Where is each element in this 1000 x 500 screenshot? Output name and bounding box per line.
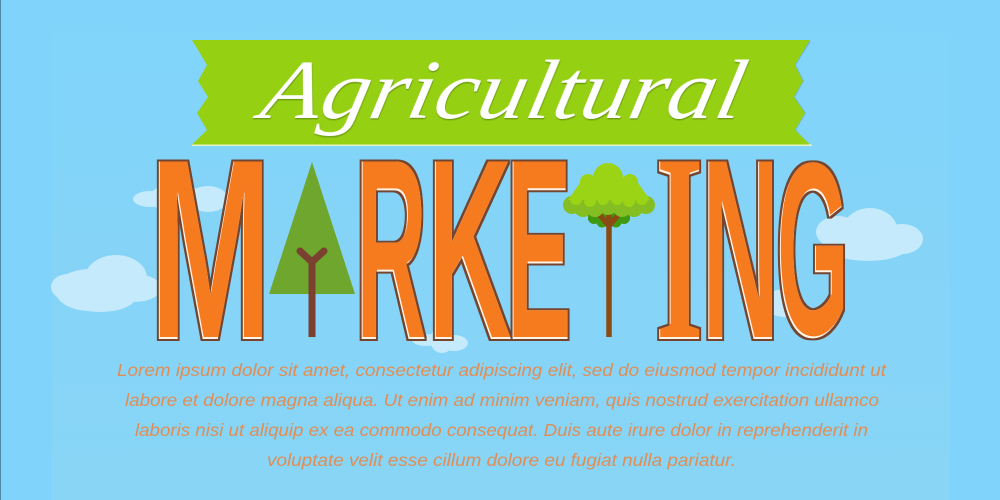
- dark green lower foliage: [588, 205, 630, 228]
- banner shadow: [193, 41, 811, 146]
- mid green foliage: [563, 196, 655, 217]
- icon: round tree as letter T: [563, 163, 655, 337]
- body paragraph: [117, 360, 887, 470]
- cloud: behind letter N and G: [768, 290, 805, 317]
- line 2: labore et dolore magna aliqua. Ut enim ad minim veniam, quis nostrud exercitation ullamco: [125, 390, 879, 410]
- banner: [192, 40, 812, 146]
- light green crown: [568, 163, 650, 207]
- icon: pine tree as letter A: [269, 162, 355, 337]
- letter N: N: [701, 106, 779, 394]
- letter G: G: [776, 111, 849, 389]
- banner white edge: [192, 144, 812, 146]
- title: Agricultural: Agricultural: [248, 44, 755, 137]
- letter E: E: [506, 106, 571, 395]
- letter M: M: [149, 107, 271, 394]
- line 3: laboris nisi ut aliquip ex ea commodo consequat. Duis aute irure dolor in reprehenderit in: [135, 420, 868, 440]
- banner ribbon: [192, 40, 810, 144]
- cloud: right: [816, 208, 923, 261]
- letter R: R: [355, 107, 427, 394]
- cloud: upper left: [133, 183, 228, 213]
- cloud: bottom centre: [412, 327, 468, 353]
- left edge line: [0, 0, 1, 500]
- letter I: I: [655, 97, 703, 398]
- letter K: K: [427, 106, 512, 394]
- line 4: voluptate velit esse cillum dolore eu fugiat nulla pariatur.: [267, 450, 736, 470]
- cloud: lower left: [51, 255, 161, 312]
- heading letters: MARKETING: [149, 97, 849, 398]
- line 1: Lorem ipsum dolor sit amet, consectetur adipiscing elit, sed do eiusmod tempor incididunt ut: [117, 360, 887, 380]
- trunk: [599, 211, 619, 337]
